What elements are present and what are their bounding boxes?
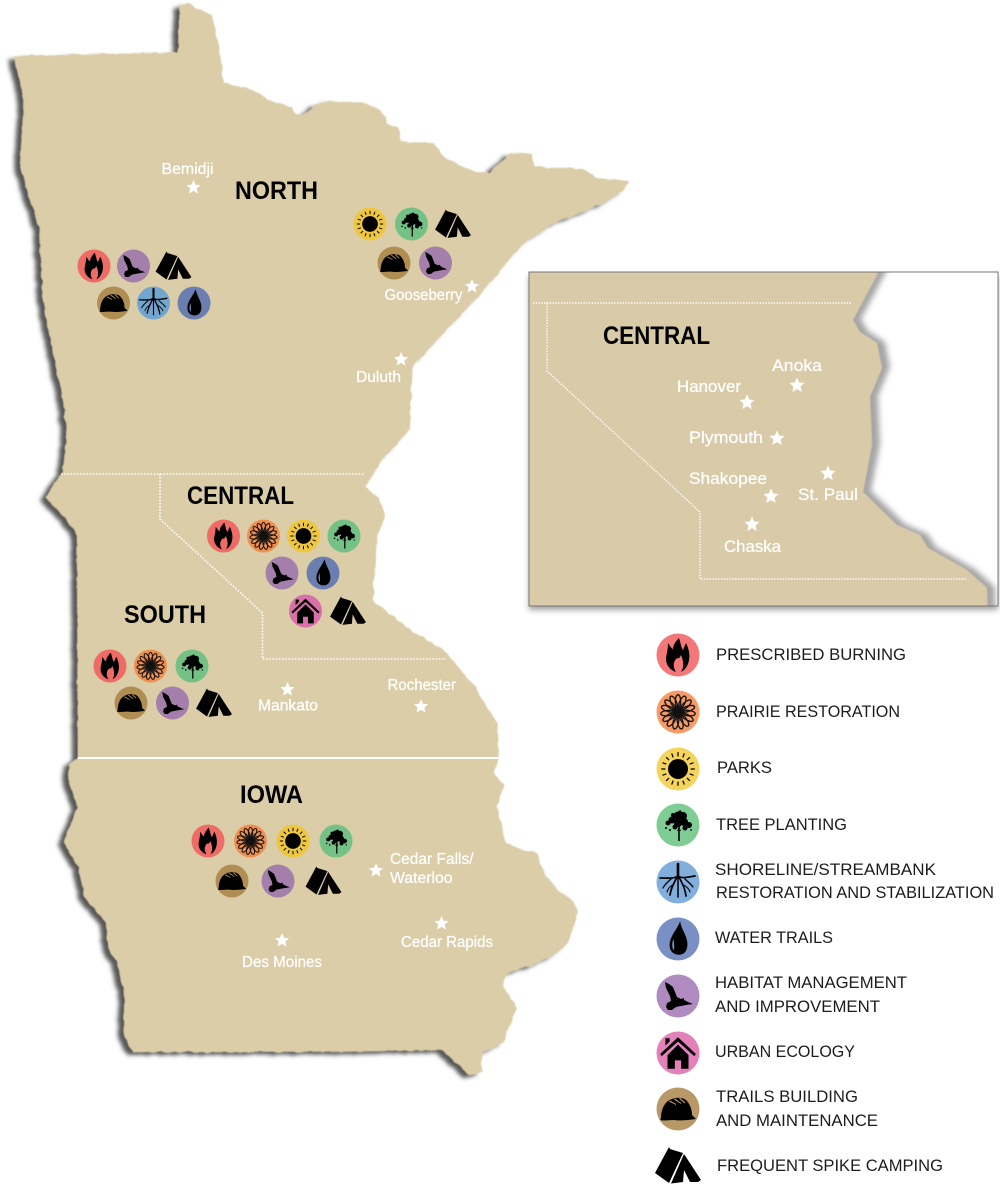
icon group: north-east projects	[354, 208, 471, 280]
city: Cedar Rapids: Cedar Rapids	[401, 934, 493, 951]
city: Mankato	[258, 682, 318, 714]
legend item: trails building: AND MAINTENANCE	[716, 1111, 878, 1130]
icon: water trails	[178, 286, 210, 320]
city: Des Moines	[242, 933, 322, 971]
region heading: SOUTH: SOUTH	[124, 601, 206, 629]
legend item: trails building	[656, 1087, 878, 1130]
icon: prairie restoration	[234, 824, 267, 858]
icon: habitat management	[156, 686, 189, 720]
city: Plymouth: Plymouth	[689, 429, 763, 447]
city: Duluth	[356, 352, 408, 386]
icon: urban ecology	[289, 594, 322, 628]
icon: habitat management	[262, 864, 294, 898]
legend item: tree planting: TREE PLANTING	[716, 815, 847, 834]
city: Rochester: Rochester	[388, 677, 456, 694]
city: St. Paul: St. Paul	[798, 486, 858, 504]
icon: parks	[276, 824, 310, 858]
city: Des Moines: Des Moines	[242, 954, 322, 971]
icon: prescribed burning	[192, 824, 224, 858]
legend item: shoreline restoration	[656, 860, 994, 904]
city: Cedar Falls/Waterloo: Waterloo	[390, 870, 452, 887]
legend item: parks: PARKS	[717, 758, 772, 777]
region heading: IOWA: IOWA	[240, 781, 303, 809]
icon: prescribed burning	[207, 520, 240, 552]
icon: habitat management	[117, 250, 150, 282]
city: Shakopee: Shakopee	[689, 470, 767, 488]
legend item: spike camping: FREQUENT SPIKE CAMPING	[717, 1156, 943, 1175]
city: Cedar Rapids	[401, 916, 493, 951]
legend item: habitat management	[656, 973, 907, 1018]
panel: Central region inset map	[525, 272, 1000, 614]
city: Duluth: Duluth	[356, 369, 401, 386]
icon: tree planting	[328, 520, 360, 552]
icon group: south projects	[94, 650, 232, 720]
icon: spike camping	[435, 209, 471, 238]
legend item: prairie restoration	[656, 690, 900, 734]
legend item: tree planting	[656, 804, 847, 846]
icon group: north-west projects	[78, 250, 210, 320]
city: Rochester	[388, 677, 456, 713]
icon: prescribed burning	[78, 250, 110, 282]
city: St. Paul	[798, 466, 858, 504]
icon: prairie restoration	[247, 520, 280, 552]
legend item: habitat management: AND IMPROVEMENT	[715, 997, 880, 1016]
region heading: CENTRAL: CENTRAL	[187, 482, 294, 510]
icon: tree planting	[320, 824, 352, 858]
icon: trails building	[216, 864, 248, 898]
map: Minnesota and Iowa landmass	[14, 3, 629, 1075]
city: Cedar Falls/Waterloo	[369, 851, 474, 887]
icon: spike camping	[196, 688, 232, 717]
city: Shakopee	[689, 470, 778, 503]
legend item: shoreline restoration: SHORELINE/STREAMBANK	[715, 860, 937, 879]
icon: habitat management	[266, 556, 298, 590]
city: Hanover: Hanover	[677, 378, 742, 396]
icon: parks	[287, 520, 320, 552]
city: Mankato: Mankato	[258, 698, 318, 714]
legend item: prescribed burning: PRESCRIBED BURNING	[716, 645, 906, 664]
legend item: trails building: TRAILS BUILDING	[716, 1087, 858, 1106]
city: Bemidji: Bemidji	[162, 161, 214, 178]
city: Bemidji	[162, 161, 214, 194]
icon: spike camping	[330, 596, 366, 625]
icon group: Iowa projects	[192, 824, 352, 898]
icon: parks	[354, 208, 386, 240]
icon: water trails	[306, 556, 340, 590]
icon: habitat management	[419, 246, 452, 280]
city: Anoka: Anoka	[772, 357, 823, 375]
city: Chaska: Chaska	[724, 538, 782, 556]
icon group: central projects	[207, 520, 366, 628]
icon: prairie restoration	[134, 650, 167, 682]
legend	[655, 634, 994, 1184]
city: Hanover	[677, 378, 754, 409]
icon: spike camping	[306, 866, 341, 895]
icon: shoreline restoration	[137, 286, 170, 320]
legend item: urban ecology: URBAN ECOLOGY	[715, 1042, 855, 1061]
legend item: urban ecology	[656, 1032, 855, 1074]
city: Anoka	[772, 357, 823, 392]
city: Cedar Falls/Waterloo: Cedar Falls/	[390, 851, 474, 868]
legend item: water trails	[656, 918, 833, 960]
legend item: parks	[656, 748, 772, 790]
legend item: spike camping	[655, 1147, 943, 1184]
icon: trails building	[378, 246, 410, 280]
icon: spike camping	[156, 251, 191, 280]
inset heading: CENTRAL: CENTRAL	[603, 322, 710, 350]
legend item: prescribed burning	[656, 634, 906, 676]
legend item: habitat management: HABITAT MANAGEMENT	[715, 973, 907, 992]
region heading: NORTH: NORTH	[235, 177, 318, 205]
legend item: shoreline restoration: RESTORATION AND STABILIZATION	[716, 883, 994, 902]
city: Gooseberry	[384, 279, 479, 304]
icon: tree planting	[395, 208, 428, 240]
city: Gooseberry: Gooseberry	[384, 287, 463, 304]
city: Chaska	[724, 516, 782, 556]
icon: tree planting	[176, 650, 208, 682]
legend item: water trails: WATER TRAILS	[715, 928, 833, 947]
legend item: prairie restoration: PRAIRIE RESTORATION	[716, 702, 900, 721]
icon: prescribed burning	[94, 650, 126, 682]
icon: trails building	[97, 286, 130, 320]
icon: trails building	[114, 686, 148, 720]
